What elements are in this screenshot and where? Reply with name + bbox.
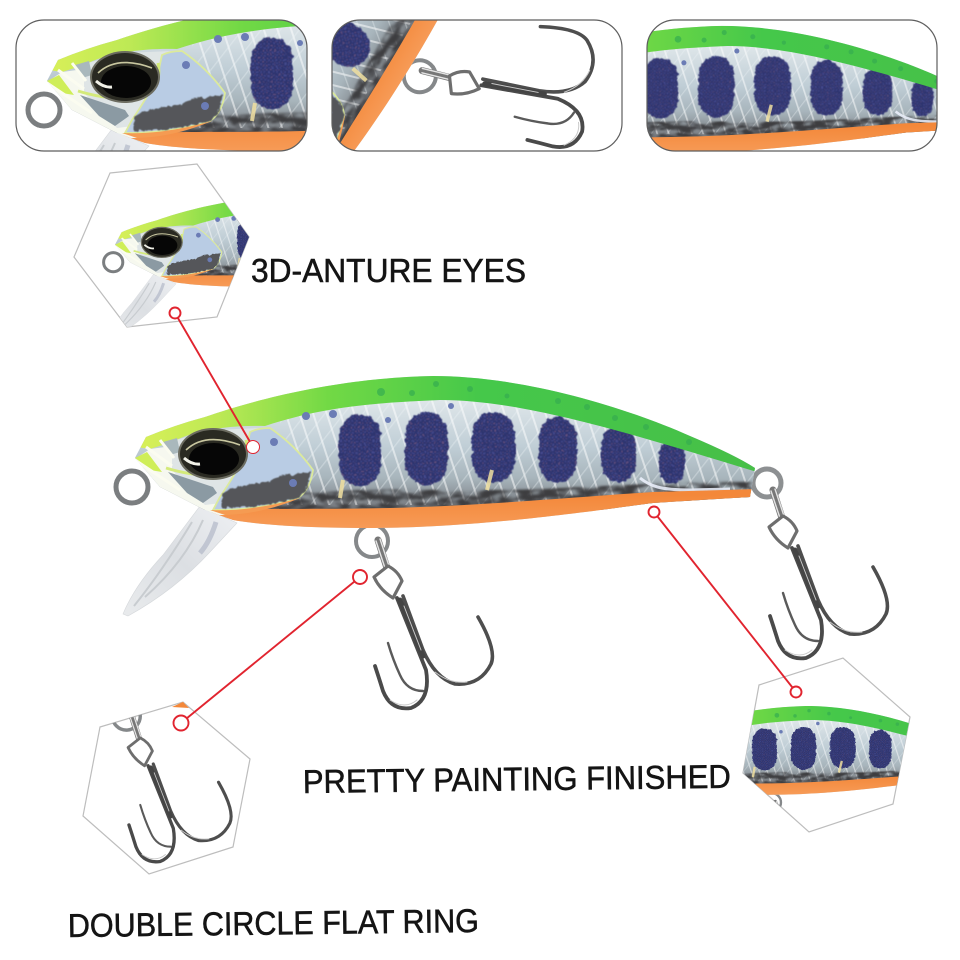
panel: body paint close-up [646, 19, 938, 152]
label: painting: PRETTY PAINTING FINISHED [303, 758, 731, 800]
callout: paint pointer [648, 506, 802, 698]
hexagon: hook detail [82, 702, 251, 874]
hexagon: eye detail [73, 163, 250, 328]
callout: eye pointer [170, 308, 260, 454]
main lure [116, 360, 887, 708]
hexagon: painting detail [742, 658, 911, 832]
label: flat ring: DOUBLE CIRCLE FLAT RING [68, 902, 479, 944]
panel: hook close-up [331, 19, 623, 152]
callout: ring pointer [174, 570, 367, 730]
label: 3D eyes: 3D-ANTURE EYES [251, 252, 526, 289]
panel: head close-up [15, 19, 308, 152]
